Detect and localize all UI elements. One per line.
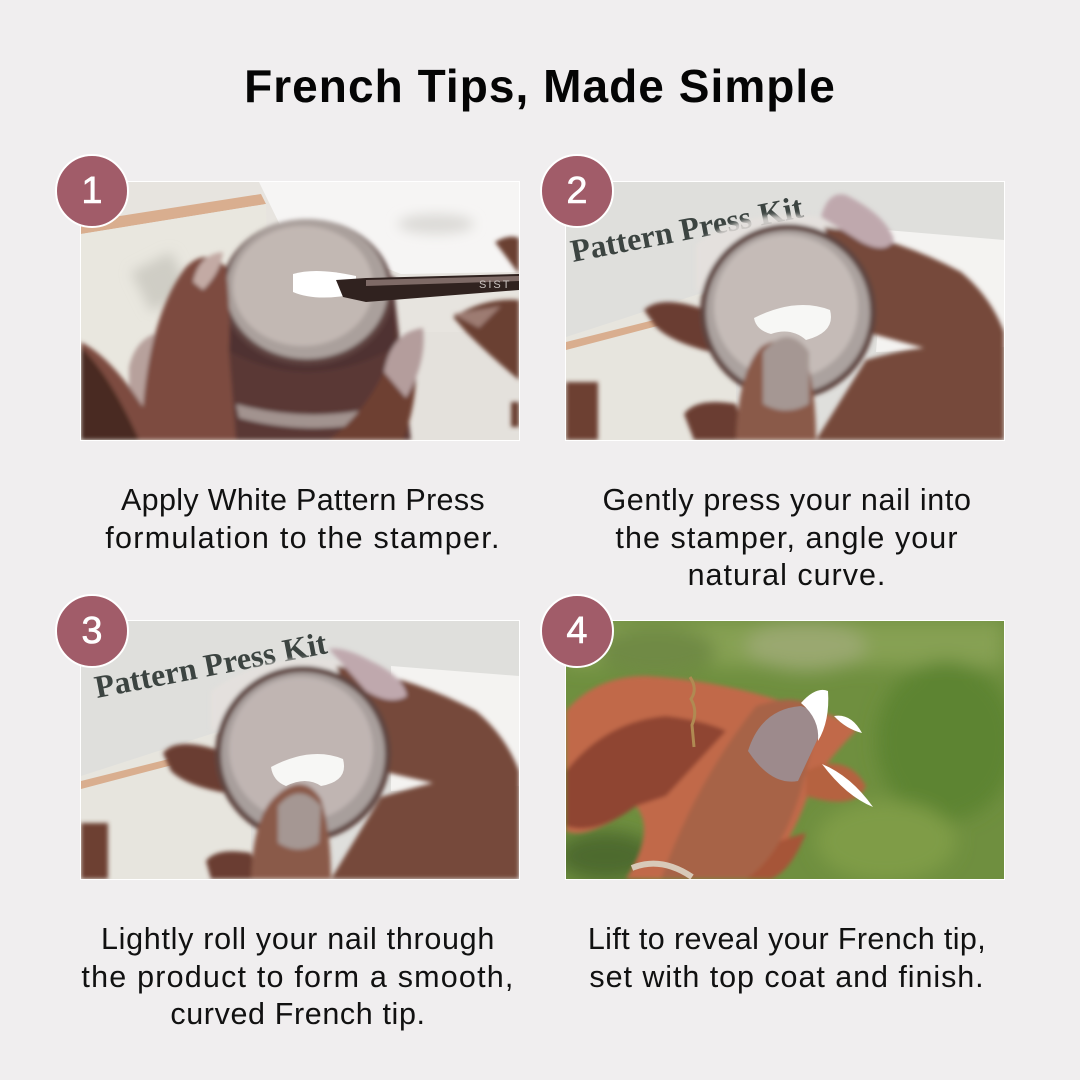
panel: step 4 photo (565, 620, 1005, 880)
thumbnail (748, 706, 820, 782)
box lettering: Pattern Press Kit (91, 624, 330, 705)
caption: step 3: Lightly roll your nail through (101, 922, 495, 956)
caption: step 4: set with top coat and finish. (589, 960, 985, 994)
badge: step 1: 1 (81, 170, 103, 212)
badge: step 1 (55, 154, 129, 228)
right hand (816, 227, 1004, 440)
caption: step 2: the stamper, angle your (615, 520, 959, 554)
stamper side band (696, 215, 866, 292)
badge: step 3: 3 (81, 610, 103, 652)
badge: step 4: 4 (566, 610, 588, 652)
caption: step 2: Gently press your nail into (602, 483, 972, 517)
caption: step 2: natural curve. (688, 558, 886, 592)
caption: step 4 (588, 922, 986, 994)
title: French Tips, Made Simple (244, 60, 836, 112)
mesh jar (222, 282, 411, 440)
left hand (81, 257, 236, 440)
translucent jar edge (129, 332, 231, 440)
caption: step 4: Lift to reveal your French tip, (588, 922, 986, 956)
panel: step 3 photo (80, 620, 520, 880)
caption: step 2 (602, 483, 972, 592)
panel: step 1 photo: SIST (479, 279, 511, 291)
right fingers (453, 300, 519, 380)
right thumb (329, 360, 416, 440)
badge: step 4 (540, 594, 614, 668)
panel: step 2 photo (565, 181, 1005, 441)
badge: step 2 (540, 154, 614, 228)
caption: step 3 (81, 922, 515, 1031)
panel: step 1 photo (80, 181, 520, 441)
caption: step 1: formulation to the stamper. (105, 520, 501, 554)
paint and brush (293, 271, 356, 298)
caption: step 1: Apply White Pattern Press (121, 483, 485, 517)
caption: step 3: curved French tip. (170, 997, 426, 1031)
left fingers (644, 302, 711, 352)
badge: step 3 (55, 594, 129, 668)
caption: step 3: the product to form a smooth, (81, 960, 515, 994)
caption: step 1 (105, 483, 501, 554)
badge: step 2: 2 (566, 170, 588, 212)
thumb (736, 340, 816, 440)
box lettering: Pattern Press Kit (567, 188, 806, 269)
rings (690, 677, 695, 747)
